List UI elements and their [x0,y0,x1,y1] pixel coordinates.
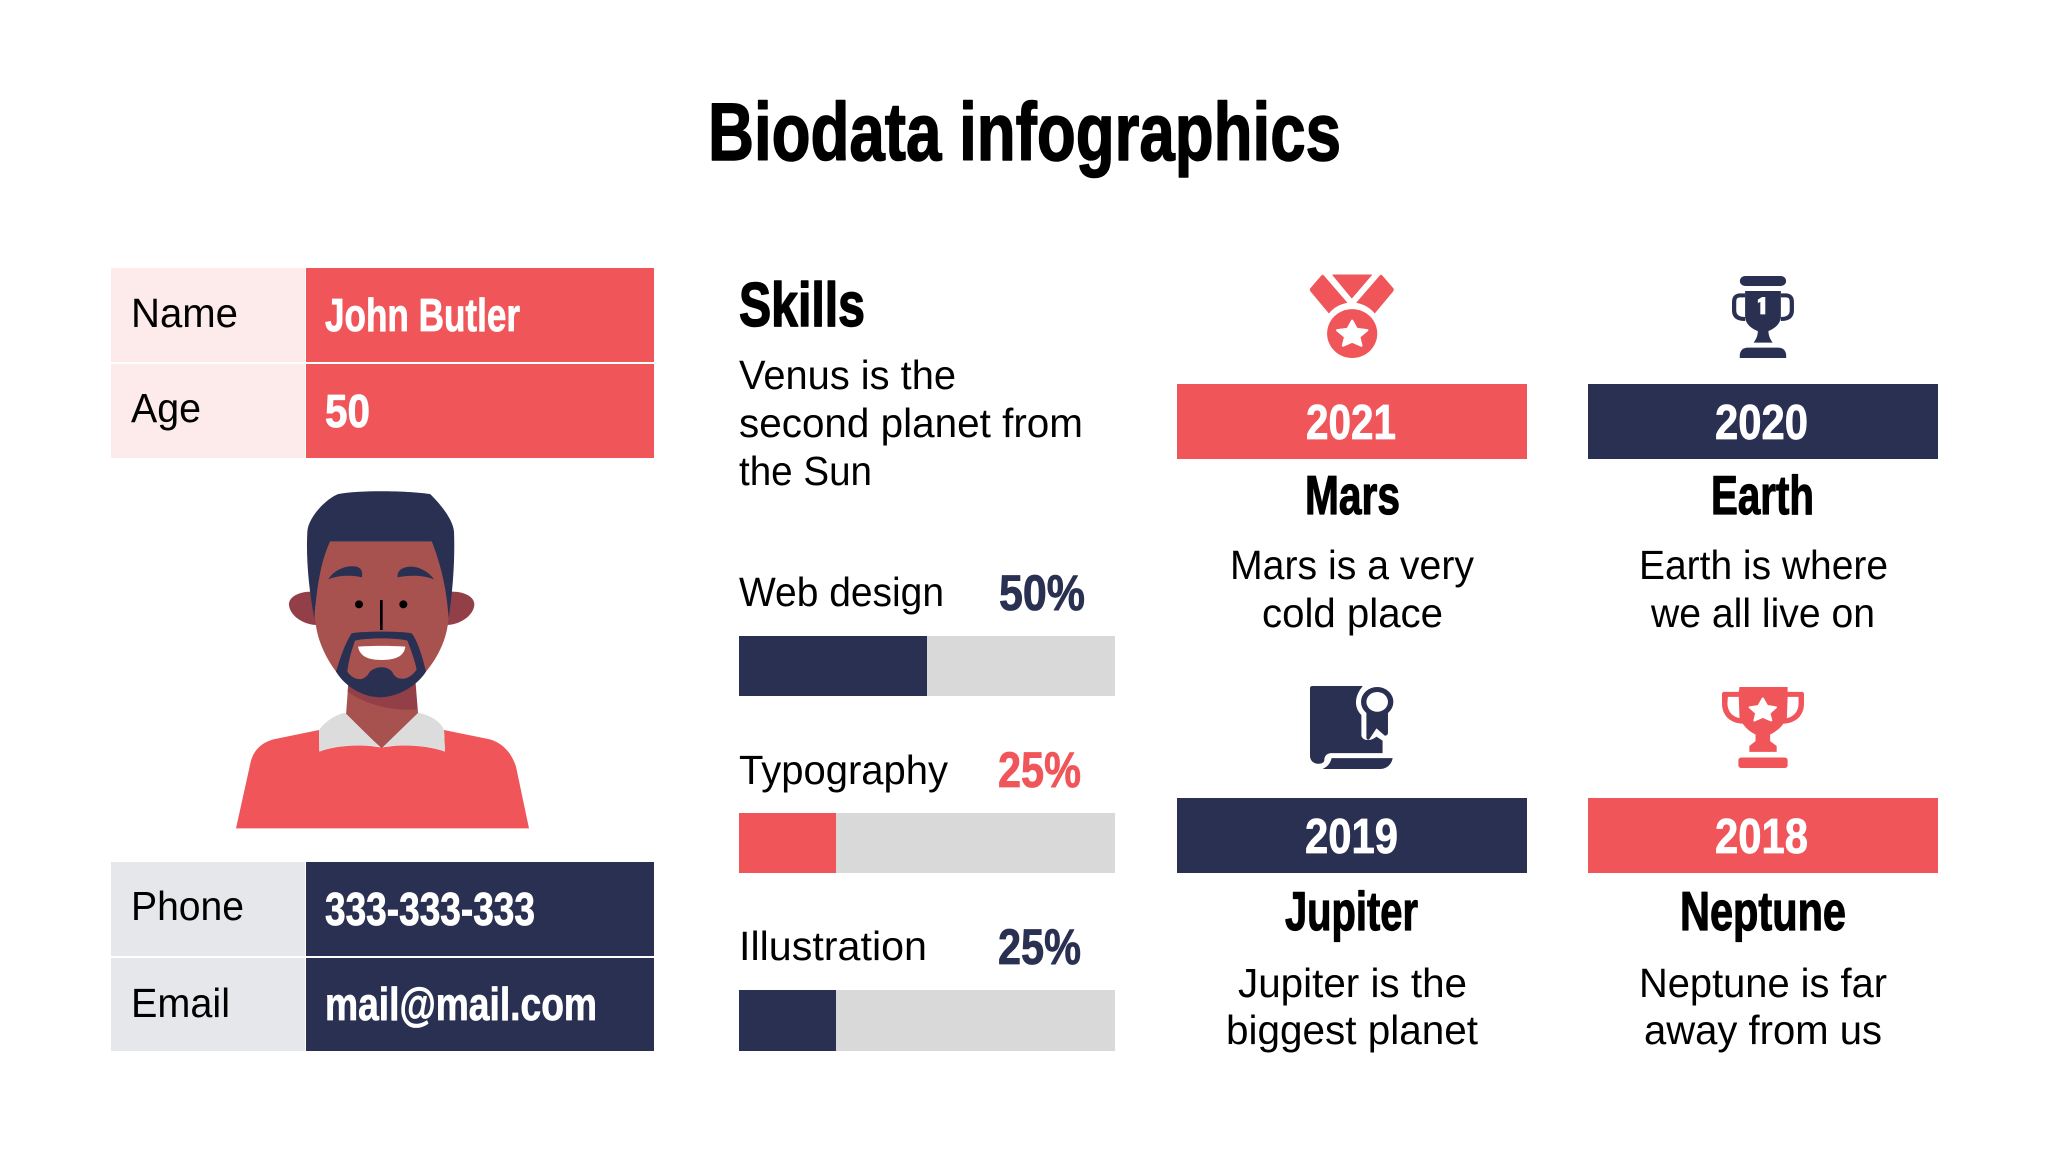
row: email: mail@mail.com [325,978,597,1030]
panel: award 2020 Earth [1588,276,1938,636]
skill bar: typography 25% [739,742,1115,873]
year bar 2019 [1177,798,1527,873]
heading: Earth: Earth [1711,464,1814,526]
description: Earth [1639,542,1888,636]
panel: contact bottom table [111,862,654,1051]
description: Neptune: away from us [1644,1007,1882,1053]
icon: book with ribbon seal [1310,686,1393,769]
description: Earth: we all live on [1650,590,1875,636]
title: Biodata infographics [708,87,1341,178]
row: name: John Butler [325,289,520,341]
skills description [739,352,1083,494]
skill bar: web design 50%: 50% [999,565,1085,621]
year bar 2021: 2021 [1306,396,1396,450]
description: Jupiter [1226,960,1479,1053]
row: name [111,268,654,362]
description: Mars: cold place [1262,590,1443,636]
year bar 2018: 2018 [1715,810,1808,864]
row: age [111,364,654,458]
description: Mars [1230,542,1474,636]
row: email: Email [131,980,230,1026]
heading: Jupiter: Jupiter [1285,880,1418,942]
year bar 2021 [1177,384,1527,459]
row: phone [111,862,654,956]
skills description: the Sun [739,448,872,494]
panel: skills [739,271,1115,1051]
skill bar: illustration 25%: 25% [998,919,1081,975]
panel: award 2019 Jupiter [1177,686,1527,1053]
row: phone: 333-333-333 [325,883,535,935]
heading: Mars: Mars [1305,464,1400,526]
description: Jupiter: biggest planet [1226,1007,1479,1053]
year bar 2018 [1588,798,1938,873]
row: age: Age [131,385,201,431]
panel: award 2018 Neptune [1588,687,1938,1053]
icon: medal [1310,275,1394,358]
portrait: man with beard and red shirt [236,491,529,828]
row: name: Name [131,290,238,336]
skill bar: typography 25%: 25% [998,742,1081,798]
year bar 2020 [1588,384,1938,459]
panel: personal info top table [111,268,654,458]
row: email [111,958,654,1051]
description: Earth: Earth is where [1639,542,1888,588]
skills description: second planet from [739,400,1083,446]
skills description: Venus is the [739,352,956,398]
skill bar: web design 50% [739,565,1115,696]
icon: trophy with star [1722,687,1804,768]
skill bar: web design 50%: Web design [739,569,944,615]
row: phone: Phone [131,883,244,929]
panel: award 2021 Mars [1177,275,1527,636]
row: age: 50 [325,385,370,437]
description: Neptune [1639,960,1887,1053]
heading: Neptune: Neptune [1680,880,1846,942]
skill bar: illustration 25% [739,919,1115,1051]
skills heading: Skills [739,271,865,340]
description: Neptune: Neptune is far [1639,960,1887,1006]
skill bar: typography 25%: Typography [739,747,948,793]
year bar 2019: 2019 [1305,810,1398,864]
description: Jupiter: Jupiter is the [1238,960,1467,1006]
year bar 2020: 2020 [1715,396,1808,450]
description: Mars: Mars is a very [1230,542,1474,588]
skill bar: illustration 25%: Illustration [739,923,927,969]
icon: trophy with number one [1734,276,1792,358]
